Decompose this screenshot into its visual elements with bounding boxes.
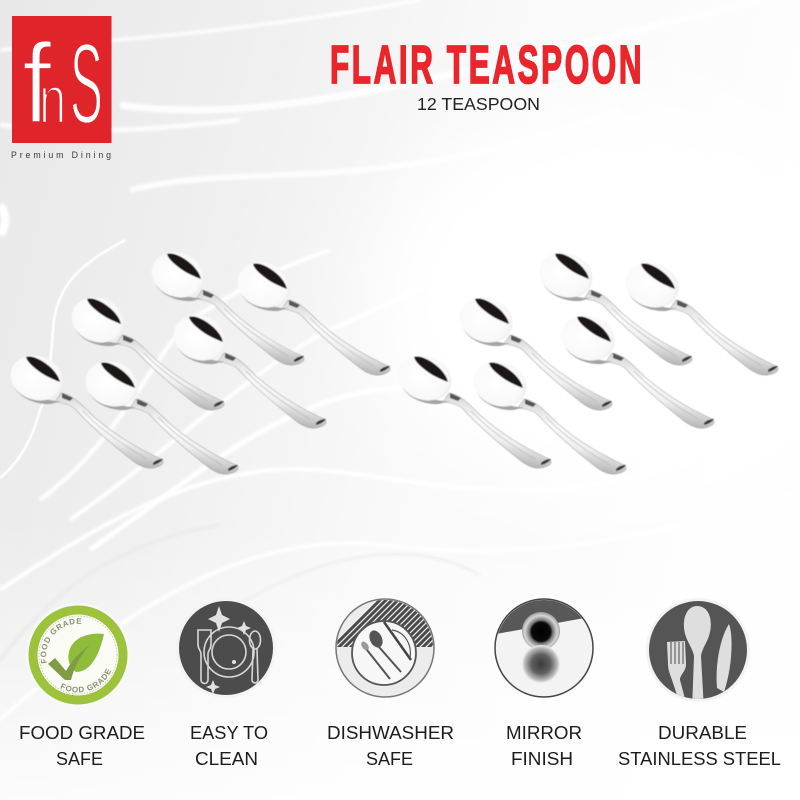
- label: easy to clean: EASY TO: [190, 722, 268, 743]
- title: FLAIR TEASPOON: [330, 35, 644, 95]
- label: mirror finish: FINISH: [511, 748, 573, 769]
- icon: food grade safe: [28, 606, 128, 704]
- label: dishwasher safe: DISHWASHER: [327, 722, 454, 743]
- label: easy to clean: [190, 722, 268, 769]
- icon: food grade safe: FOOD GRADE: [60, 668, 112, 692]
- logo red square: [12, 16, 112, 143]
- logo tagline: Premium Dining: [11, 150, 111, 160]
- icon: easy to clean: [176, 598, 276, 698]
- icon: durable stainless steel: [646, 598, 750, 710]
- logo: FnS Premium Dining: [11, 16, 112, 160]
- label: food grade safe: SAFE: [56, 748, 103, 769]
- icon: food grade safe: FOOD GRADE: [40, 618, 82, 664]
- label: durable stainless steel: DURABLE: [658, 722, 747, 743]
- spoon set: right six: [392, 245, 778, 474]
- label: food grade safe: [19, 722, 145, 769]
- label: dishwasher safe: SAFE: [366, 748, 413, 769]
- label: durable stainless steel: [618, 722, 781, 769]
- label: easy to clean: CLEAN: [195, 748, 258, 769]
- label: food grade safe: FOOD GRADE: [19, 722, 145, 743]
- icon: mirror finish: [495, 596, 593, 697]
- spoon set: left six: [4, 245, 390, 474]
- logo monogram: S: [70, 19, 103, 148]
- subtitle: 12 TEASPOON: [417, 94, 540, 114]
- logo monogram: [22, 19, 103, 148]
- logo monogram: n: [39, 61, 66, 138]
- label: mirror finish: [506, 722, 582, 769]
- logo monogram: f: [22, 21, 52, 148]
- icon: dishwasher safe: [335, 598, 435, 698]
- label: dishwasher safe: [327, 722, 454, 769]
- label: mirror finish: MIRROR: [506, 722, 582, 743]
- label: durable stainless steel: STAINLESS STEEL: [618, 748, 781, 769]
